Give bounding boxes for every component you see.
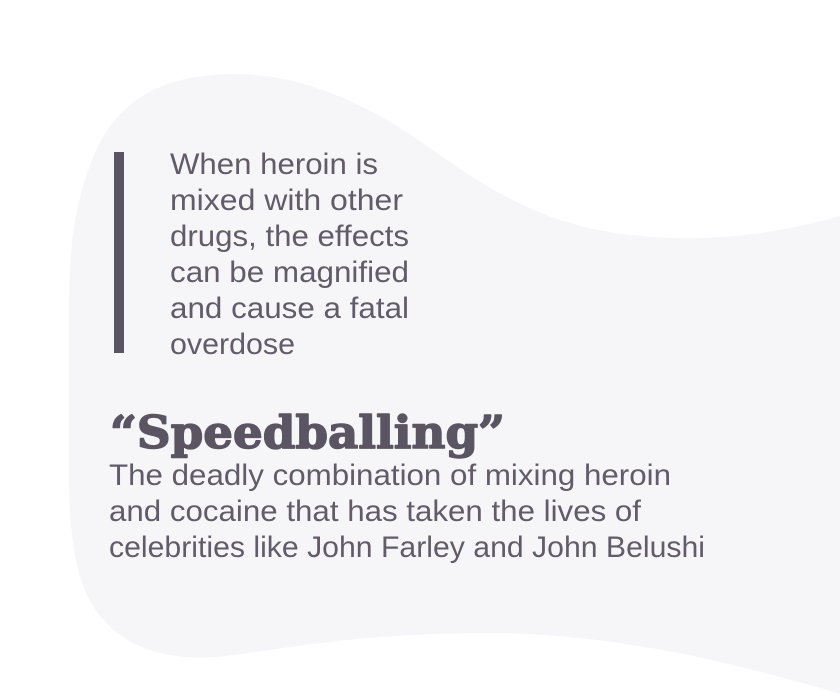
pull quote text: can be magnified: [170, 256, 409, 289]
definition text: and cocaine that has taken the lives of: [109, 495, 642, 528]
pull quote text: mixed with other: [170, 184, 403, 217]
accent bar: [114, 152, 124, 353]
definition text: celebrities like John Farley and John Belushi: [109, 531, 705, 564]
pull quote text: overdose: [170, 328, 295, 361]
pull quote text: and cause a fatal: [170, 292, 409, 325]
pull quote text: drugs, the effects: [170, 220, 409, 253]
pull quote text: [170, 148, 409, 361]
definition text: The deadly combination of mixing heroin: [109, 459, 671, 492]
heading: Speedballing: “Speedballing”: [110, 406, 505, 459]
definition text: [109, 459, 705, 564]
pull quote text: When heroin is: [170, 148, 378, 181]
